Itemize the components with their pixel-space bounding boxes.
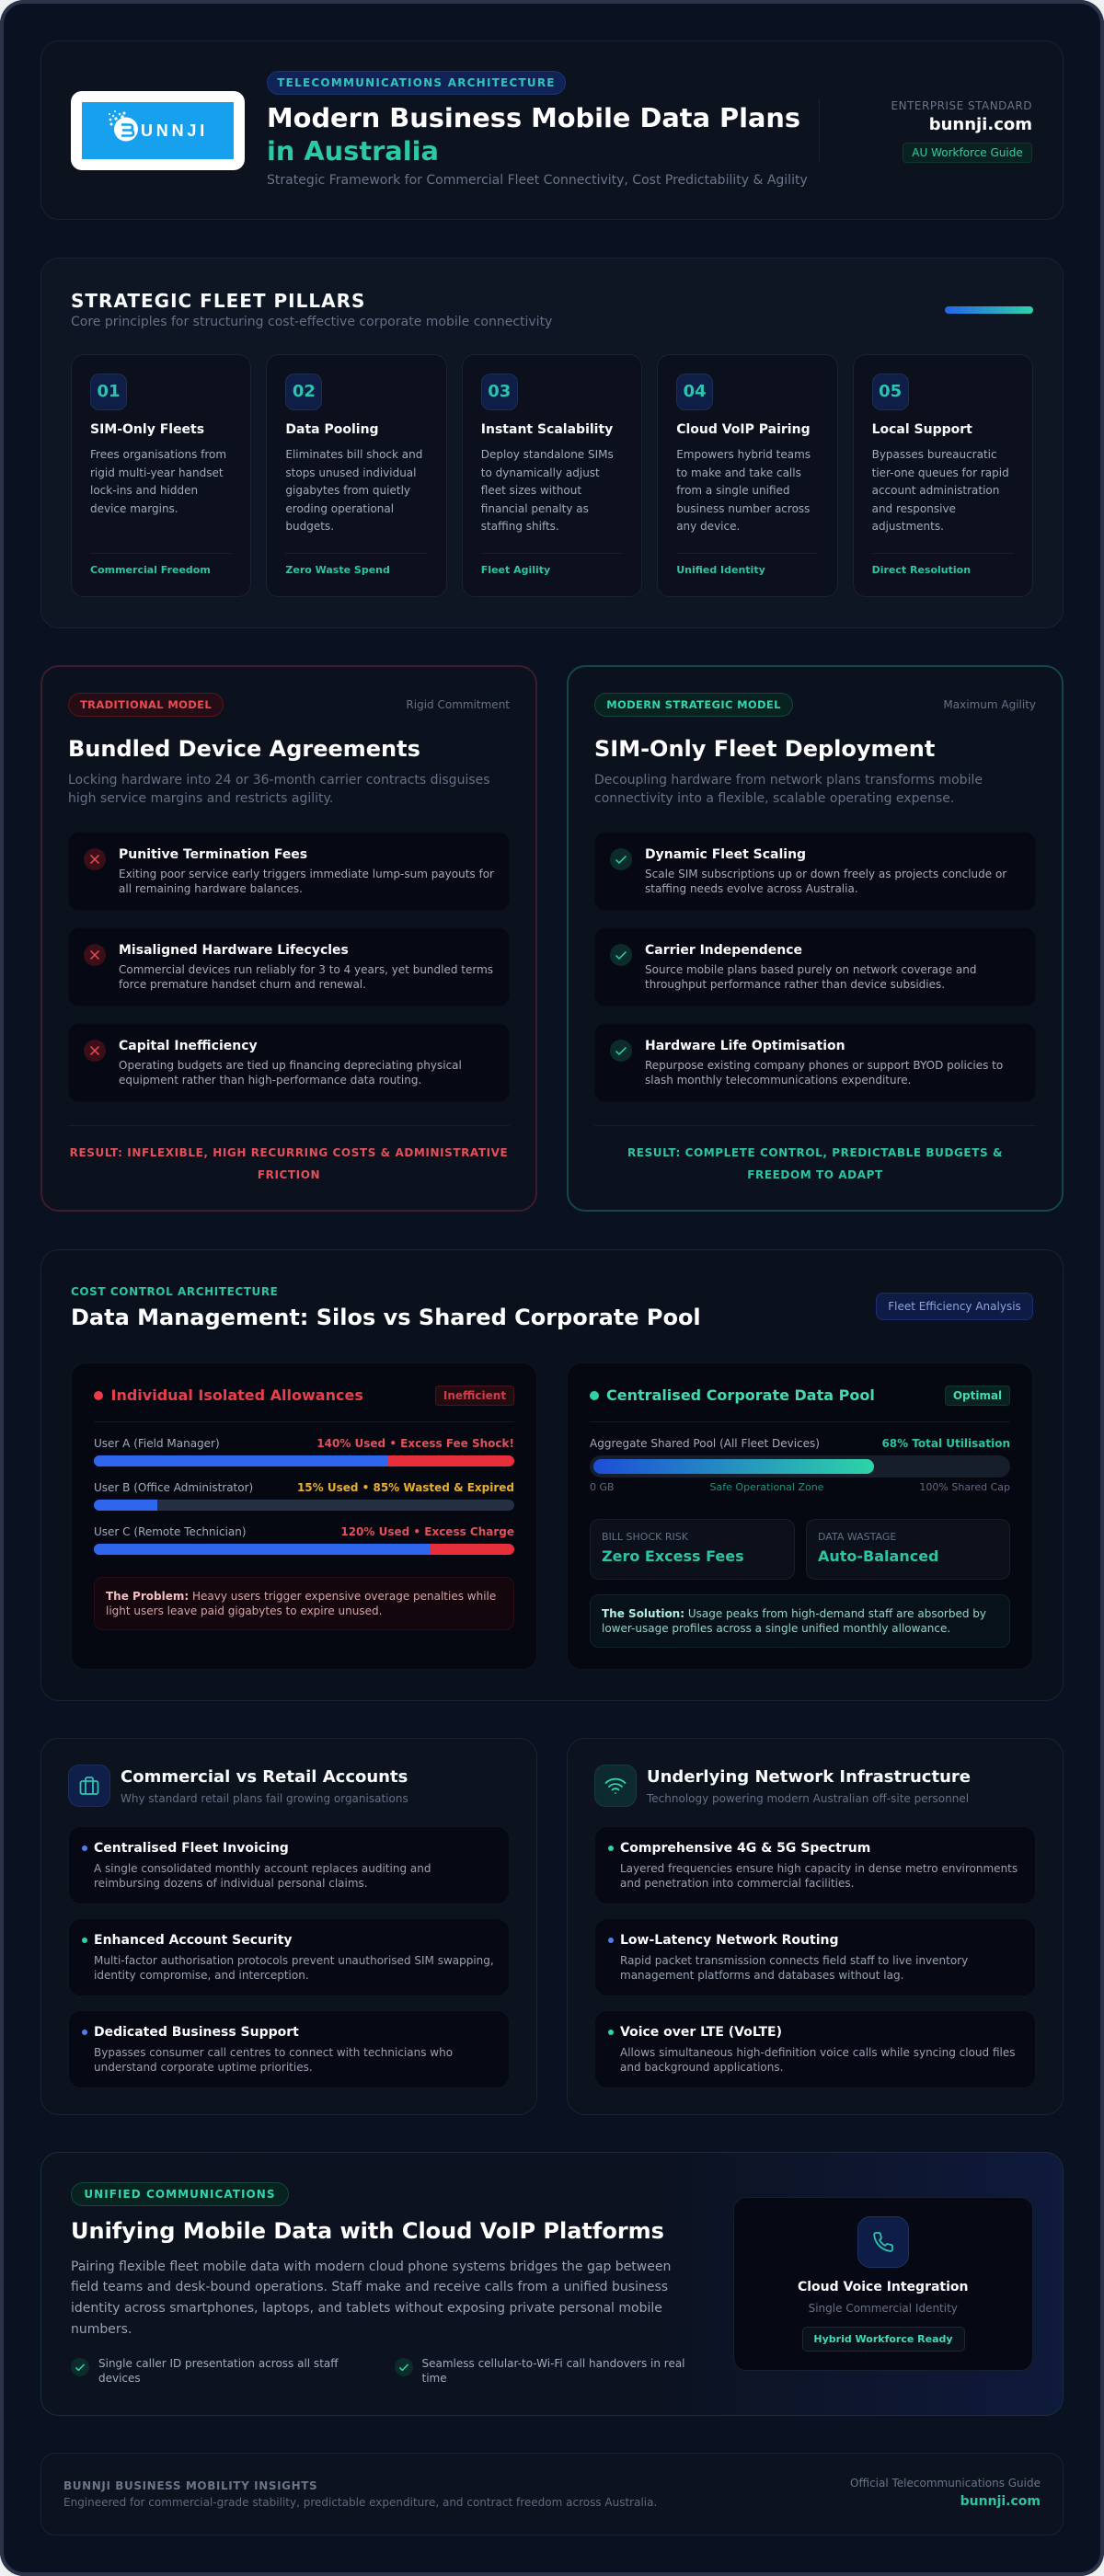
item title: Comprehensive 4G & 5G Spectrum [620, 1840, 870, 1855]
result text [70, 1146, 508, 1181]
badge: inefficient: Inefficient [443, 1389, 506, 1402]
description: connectivity into a flexible, scalable operating expense. [594, 791, 954, 806]
card text: Bypasses bureaucratic [872, 448, 997, 461]
panel: traditional model [40, 665, 537, 1212]
item text [645, 962, 977, 990]
card: SIM-only fleets [71, 354, 251, 597]
card text: device margins. [90, 502, 178, 515]
card: instant scalability [462, 354, 642, 597]
callout: the solution: lower-usage profiles across a single unified monthly allowance. [602, 1622, 950, 1635]
feature text: devices [98, 2372, 141, 2385]
tag: rigid commitment: Rigid Commitment [406, 698, 510, 711]
item: voice over LTE [594, 2010, 1036, 2088]
bar: user A [94, 1455, 514, 1466]
item text [620, 1862, 1018, 1890]
subpanel: individual isolated allowances [71, 1363, 537, 1670]
value: user B: 15% Used • 85% Wasted & Expired [297, 1481, 514, 1494]
feature text: time [421, 2372, 447, 2385]
footer site link: bunnji.com [960, 2494, 1041, 2509]
card text: Deploy standalone SIMs [481, 448, 614, 461]
item text: slash monthly telecommunications expenditure. [645, 1073, 911, 1086]
heading: STRATEGIC FLEET PILLARS [71, 290, 365, 312]
subpanel title: Centralised Corporate Data Pool [606, 1386, 875, 1404]
panel subtitle: Technology powering modern Australian off-site personnel [647, 1792, 969, 1805]
callout: the solution [590, 1594, 1010, 1648]
item text [620, 1954, 968, 1982]
card: local support [853, 354, 1033, 597]
badge: telecommunications architecture: TELECOMMUNICATIONS ARCHITECTURE [277, 76, 556, 89]
bullet [607, 1938, 613, 1943]
number: 01 [97, 382, 121, 401]
card title: Cloud VoIP Pairing [676, 422, 811, 437]
panel: data management [40, 1249, 1064, 1701]
item text: Source mobile plans based purely on network coverage and [645, 962, 977, 975]
badge: inefficient [435, 1386, 514, 1406]
item text [645, 867, 1006, 894]
item text: staffing needs evolve across Australia. [645, 881, 858, 894]
icon: briefcase [68, 1765, 110, 1807]
feature text: Seamless cellular-to-Wi-Fi call handovers in real [421, 2357, 685, 2370]
callout: the problem: The Problem: Heavy users trigger expensive overage penalties while [106, 1590, 496, 1603]
item title: Voice over LTE (VoLTE) [620, 2024, 782, 2039]
feature: seamless handover [395, 2357, 685, 2385]
number: 05 [879, 382, 902, 401]
description: numbers. [71, 2322, 132, 2337]
row: user C: User C (Remote Technician) [94, 1525, 247, 1538]
item text: Allows simultaneous high-definition voice calls while syncing cloud files [620, 2046, 1015, 2059]
item text: throughput performance rather than device subsidies. [645, 977, 945, 990]
icon: check [394, 2358, 412, 2376]
badge: fleet efficiency analysis: Fleet Efficiency Analysis [888, 1300, 1021, 1313]
badge: optimal [945, 1386, 1010, 1406]
result text: RESULT: INFLEXIBLE, HIGH RECURRING COSTS & ADMINISTRATIVE [70, 1146, 508, 1159]
item text [119, 867, 494, 894]
subheading: Core principles for structuring cost-effective corporate mobile connectivity [71, 315, 552, 329]
title: Modern Business Mobile Data Plans [267, 102, 800, 133]
item text: Bypasses consumer call centres to connect with technicians who [94, 2046, 453, 2059]
card tag: Unified Identity [676, 564, 765, 576]
description: Pairing flexible fleet mobile data with modern cloud phone systems bridges the gap between [71, 2260, 671, 2274]
item text [94, 2046, 453, 2074]
panel title: Underlying Network Infrastructure [647, 1767, 971, 1787]
card text [285, 448, 422, 533]
scale labels [590, 1481, 1010, 1493]
item text: Exiting poor service early triggers immediate lump-sum payouts for [119, 867, 494, 880]
item: enhanced account security [68, 1918, 510, 1996]
card text: from a single unified [676, 484, 790, 497]
row: user B: User B (Office Administrator) [94, 1481, 253, 1494]
scale labels: 0 GB [590, 1481, 615, 1493]
heading: Unifying Mobile Data with Cloud VoIP Platforms [71, 2218, 664, 2244]
heading: Bundled Device Agreements [68, 736, 420, 762]
feature text [421, 2357, 685, 2385]
badge: optimal: Optimal [953, 1389, 1002, 1402]
card: cloud VoIP pairing [657, 354, 838, 597]
icon: check [610, 1040, 632, 1062]
item text [94, 1954, 494, 1982]
item text: Commercial devices run reliably for 3 to 4 years, yet bundled terms [119, 962, 493, 975]
description [594, 773, 983, 806]
item text: Operating budgets are tied up financing depreciating physical [119, 1058, 462, 1071]
item title: Dynamic Fleet Scaling [645, 847, 806, 862]
item: dynamic fleet scaling [594, 832, 1036, 911]
card title: Local Support [872, 422, 972, 437]
subpanel title: Individual Isolated Allowances [110, 1386, 363, 1404]
panel: footer [40, 2453, 1064, 2536]
row: user A: User A (Field Manager) [94, 1437, 220, 1450]
item: misaligned hardware lifecycles [68, 927, 510, 1006]
item text: reimbursing dozens of individual personal claims. [94, 1877, 368, 1890]
icon: cross [84, 944, 106, 966]
badge: unified communications: UNIFIED COMMUNICATIONS [84, 2188, 276, 2201]
number [285, 374, 322, 410]
number [872, 374, 909, 410]
title [267, 102, 800, 167]
card text: financial penalty as [481, 502, 589, 515]
panel subtitle: Why standard retail plans fail growing organisations [121, 1792, 408, 1805]
heading: SIM-Only Fleet Deployment [594, 736, 935, 762]
item text [620, 2046, 1015, 2074]
card text: adjustments. [872, 520, 944, 533]
card text: Frees organisations from [90, 448, 226, 461]
stat: bill shock risk [590, 1519, 795, 1580]
card text: tier-one queues for rapid [872, 466, 1009, 479]
panel: commercial vs retail accounts [40, 1738, 537, 2115]
item title: Low-Latency Network Routing [620, 1932, 839, 1947]
item: carrier independence [594, 927, 1036, 1006]
item text: identity compromise, and interception. [94, 1969, 309, 1982]
item text: understand corporate uptime priorities. [94, 2061, 313, 2074]
card text: eroding operational [285, 502, 394, 515]
card text [481, 448, 614, 533]
scale labels: 100% Shared Cap [919, 1481, 1010, 1493]
badge: unified communications [71, 2182, 289, 2206]
item text [645, 1058, 1003, 1086]
bullet [81, 1846, 86, 1851]
feature text [98, 2357, 339, 2385]
item text [119, 962, 493, 990]
logo blue field: UNNJI [141, 121, 208, 140]
stat label: BILL SHOCK RISK [602, 1531, 688, 1543]
card text [676, 448, 811, 533]
description: high service margins and restricts agility. [68, 791, 333, 806]
badge: AU workforce guide [903, 143, 1032, 163]
footer text: Engineered for commercial-grade stability, predictable expenditure, and contract freedom across Australia. [63, 2496, 657, 2509]
item title: Dedicated Business Support [94, 2024, 299, 2039]
feature: single caller ID [71, 2357, 339, 2385]
panel: modern strategic model [567, 665, 1064, 1212]
card text: any device. [676, 520, 740, 533]
bar: user C [94, 1544, 514, 1555]
icon: phone [857, 2216, 909, 2268]
item: dedicated business support [68, 2010, 510, 2088]
description [68, 773, 490, 806]
callout: the problem: light users leave paid gigabytes to expire unused. [106, 1604, 382, 1617]
callout: the problem [94, 1577, 514, 1630]
icon: cross [84, 1040, 106, 1062]
item text: and penetration into commercial facilities. [620, 1877, 854, 1890]
bar fill [593, 1459, 874, 1474]
footer title: BUNNJI BUSINESS MOBILITY INSIGHTS [63, 2479, 317, 2492]
item: centralised fleet invoicing [68, 1826, 510, 1904]
description: Locking hardware into 24 or 36-month carrier contracts disguises [68, 773, 490, 788]
card text: stops unused individual [285, 466, 416, 479]
card text: gigabytes from quietly [285, 484, 410, 497]
stat value: Zero Excess Fees [602, 1547, 744, 1565]
item: low-latency network routing [594, 1918, 1036, 1996]
status dot [94, 1391, 103, 1400]
subtitle: Strategic Framework for Commercial Fleet Connectivity, Cost Predictability & Agility [267, 173, 808, 188]
accent bar [945, 306, 1033, 314]
card subtitle: Single Commercial Identity [809, 2302, 958, 2315]
number [90, 374, 127, 410]
card title: Data Pooling [285, 422, 379, 437]
card text: to dynamically adjust [481, 466, 600, 479]
icon: check [610, 944, 632, 966]
badge: hybrid workforce ready: Hybrid Workforce Ready [813, 2333, 953, 2345]
card text [90, 448, 226, 515]
badge: AU workforce guide: AU Workforce Guide [912, 146, 1023, 159]
panel: strategic fleet pillars [40, 258, 1064, 628]
description: Decoupling hardware from network plans transforms mobile [594, 773, 983, 788]
card text: fleet sizes without [481, 484, 581, 497]
value: user A: 140% Used • Excess Fee Shock! [316, 1437, 514, 1450]
card title: SIM-Only Fleets [90, 422, 204, 437]
item text: force premature handset churn and renewal. [119, 977, 366, 990]
card title: Cloud Voice Integration [798, 2280, 969, 2294]
number: 02 [293, 382, 316, 401]
description [71, 2260, 671, 2337]
item text: management platforms and databases without lag. [620, 1969, 903, 1982]
badge: fleet efficiency analysis [876, 1293, 1033, 1320]
number [481, 374, 518, 410]
site name: bunnji.com [929, 115, 1032, 134]
panel: underlying network infrastructure [567, 1738, 1064, 2115]
footer guide label: Official Telecommunications Guide [850, 2477, 1041, 2490]
badge: modern strategic model: MODERN STRATEGIC MODEL [606, 698, 781, 711]
tag: maximum agility: Maximum Agility [943, 698, 1036, 711]
item title: Punitive Termination Fees [119, 847, 307, 862]
card text: to make and take calls [676, 466, 801, 479]
title: in Australia [267, 135, 439, 167]
icon: cross [84, 848, 106, 870]
card text: staffing shifts. [481, 520, 559, 533]
number: 03 [488, 382, 511, 401]
item title: Capital Inefficiency [119, 1039, 258, 1053]
item title: Carrier Independence [645, 943, 802, 958]
card tag: Zero Waste Spend [285, 564, 390, 576]
badge: traditional model [68, 693, 224, 717]
item text [94, 1862, 431, 1890]
logo: Bunnji [71, 91, 245, 170]
item text: all remaining hardware balances. [119, 881, 303, 894]
bullet [607, 1846, 613, 1851]
value: user C: 120% Used • Excess Charge [340, 1525, 514, 1538]
card tag: Commercial Freedom [90, 564, 211, 576]
subpanel: centralised corporate data pool [567, 1363, 1033, 1670]
card: data pooling [266, 354, 447, 597]
item text [119, 1058, 462, 1086]
label: aggregate shared pool: Aggregate Shared Pool (All Fleet Devices) [590, 1437, 820, 1450]
enterprise standard block [891, 99, 1032, 163]
item title: Misaligned Hardware Lifecycles [119, 943, 349, 958]
stat: data wastage [806, 1519, 1010, 1580]
panel title: Commercial vs Retail Accounts [121, 1767, 408, 1787]
card tag: Fleet Agility [481, 564, 550, 576]
bar: user B [94, 1500, 514, 1511]
card text: lock-ins and hidden [90, 484, 198, 497]
heading: Data Management: Silos vs Shared Corporate Pool [71, 1305, 701, 1330]
panel: unified communications [40, 2152, 1064, 2416]
eyebrow: COST CONTROL ARCHITECTURE [71, 1284, 278, 1297]
card text: and responsive [872, 502, 956, 515]
stat label: DATA WASTAGE [818, 1531, 896, 1543]
badge: telecommunications architecture [267, 71, 566, 95]
bar: shared pool [590, 1455, 1010, 1478]
item text: Repurpose existing company phones or support BYOD policies to [645, 1058, 1003, 1071]
number [676, 374, 713, 410]
card text: budgets. [285, 520, 334, 533]
item: comprehensive 4G and 5G spectrum [594, 1826, 1036, 1904]
item text: Scale SIM subscriptions up or down freely as projects conclude or [645, 867, 1006, 880]
item text: Multi-factor authorisation protocols prevent unauthorised SIM swapping, [94, 1954, 494, 1967]
card text: business number across [676, 502, 810, 515]
card text [872, 448, 1009, 533]
logo blue field [82, 102, 234, 159]
item: hardware life optimisation [594, 1023, 1036, 1102]
icon: wifi [594, 1765, 637, 1807]
icon: check [610, 848, 632, 870]
label: ENTERPRISE STANDARD [891, 99, 1032, 112]
card text: Empowers hybrid teams [676, 448, 811, 461]
badge: modern strategic model [594, 693, 793, 717]
scale labels: Safe Operational Zone [710, 1481, 823, 1493]
item title: Centralised Fleet Invoicing [94, 1840, 289, 1855]
description: identity across smartphones, laptops, and tablets without exposing private personal mobile [71, 2301, 662, 2316]
stat value: Auto-Balanced [818, 1547, 939, 1565]
number: 04 [684, 382, 707, 401]
status dot [590, 1391, 599, 1400]
icon: check [71, 2358, 89, 2376]
result text: RESULT: COMPLETE CONTROL, PREDICTABLE BUDGETS & [627, 1146, 1003, 1159]
card tag: Direct Resolution [872, 564, 971, 576]
item text: Layered frequencies ensure high capacity in dense metro environments [620, 1862, 1018, 1875]
bullet [81, 2030, 86, 2035]
result text: FREEDOM TO ADAPT [747, 1168, 883, 1181]
badge: hybrid workforce ready [802, 2327, 964, 2352]
value: utilisation: 68% Total Utilisation [881, 1437, 1010, 1450]
bullet [81, 1938, 86, 1943]
description: field teams and desk-bound operations. Staff make and receive calls from a unified business [71, 2280, 668, 2294]
result text: FRICTION [258, 1168, 320, 1181]
card text: rigid multi-year handset [90, 466, 224, 479]
feature text: Single caller ID presentation across all staff [98, 2357, 339, 2370]
card title: Instant Scalability [481, 422, 613, 437]
panel: header [40, 40, 1064, 220]
card: cloud voice integration [732, 2197, 1033, 2371]
card text: Eliminates bill shock and [285, 448, 422, 461]
item text: Rapid packet transmission connects field staff to live inventory [620, 1954, 968, 1967]
item: capital inefficiency [68, 1023, 510, 1102]
item: punitive termination fees [68, 832, 510, 911]
badge: traditional model: TRADITIONAL MODEL [80, 698, 212, 711]
item text: equipment rather than high-performance data routing. [119, 1073, 421, 1086]
callout: the solution: The Solution: Usage peaks from high-demand staff are absorbed by [602, 1607, 986, 1620]
item text: and background applications. [620, 2061, 783, 2074]
item title: Enhanced Account Security [94, 1932, 293, 1947]
card text: account administration [872, 484, 999, 497]
item title: Hardware Life Optimisation [645, 1039, 845, 1053]
result text [627, 1146, 1003, 1181]
bullet [607, 2030, 613, 2035]
item text: A single consolidated monthly account replaces auditing and [94, 1862, 431, 1875]
